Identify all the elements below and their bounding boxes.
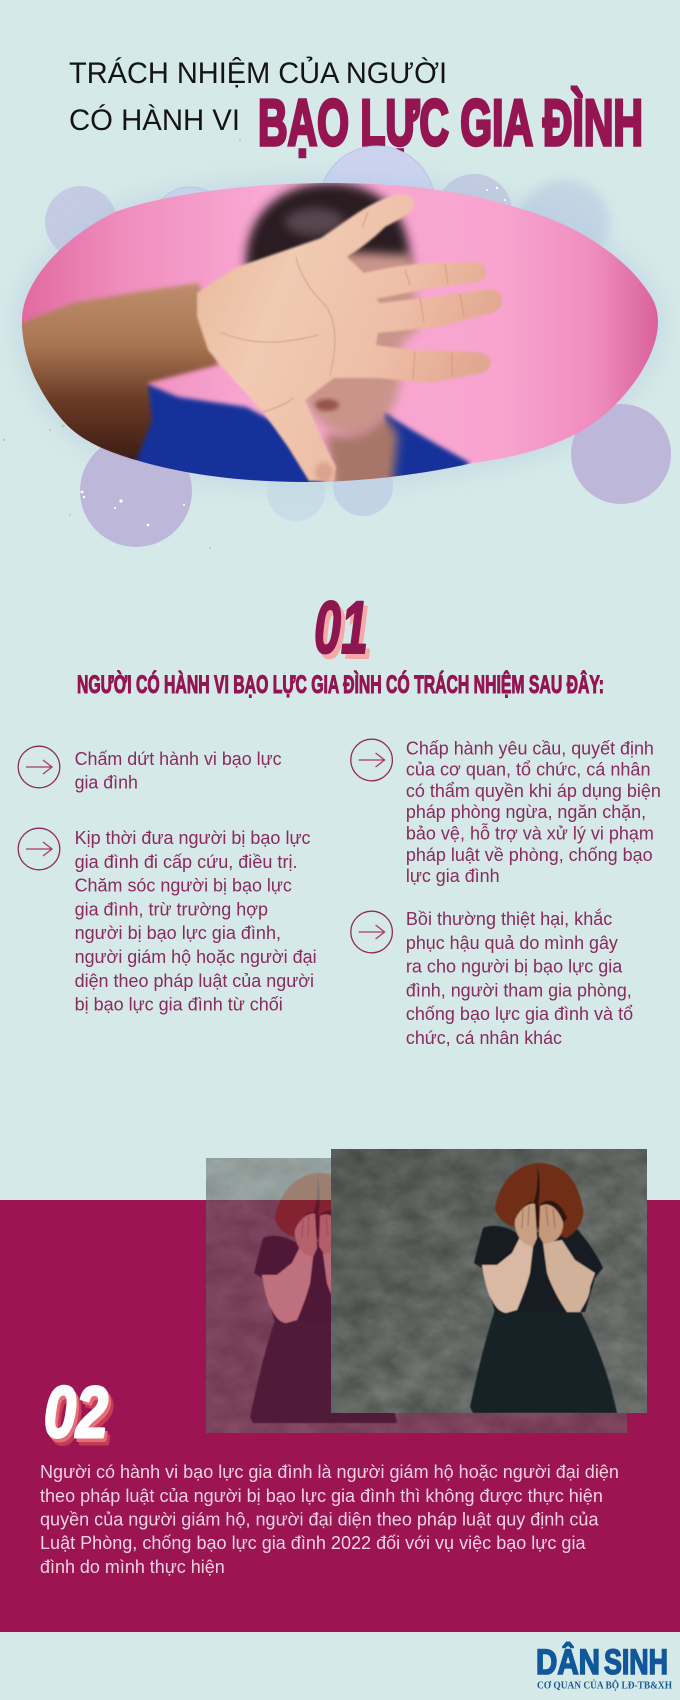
icon: arrow 3: [351, 739, 392, 781]
palm and fingers: [197, 194, 502, 481]
item: comply with decisions: Chấp hành yêu cầu, quyết định: [406, 738, 654, 758]
title line 1: TRÁCH NHIỆM CỦA NGƯỜI: [69, 56, 447, 90]
section 02 body text: theo pháp luật của người bị bạo lực gia đình thì không được thực hiện: [40, 1486, 603, 1506]
icon: arrow 2: [18, 828, 60, 870]
item: compensation: phục hậu quả do mình gây: [406, 933, 618, 953]
item: emergency care: gia đình đi cấp cứu, điều trị.: [75, 852, 297, 872]
item: emergency care: Kịp thời đưa người bị bạo lực: [75, 828, 310, 848]
section 01 number: 01: [314, 586, 368, 669]
item: comply with decisions: có thẩm quyền khi áp dụng biện: [406, 781, 661, 801]
item: stop violence: [75, 749, 282, 792]
logo: Dân Sinh: [536, 1642, 672, 1692]
section 02 body text: Luật Phòng, chống bạo lực gia đình 2022 đối với vụ việc bạo lực gia: [40, 1533, 586, 1553]
item: compensation: chống bạo lực gia đình và tổ: [406, 1004, 633, 1024]
blue shirt: [120, 383, 470, 490]
item: compensation: chức, cá nhân khác: [406, 1028, 562, 1048]
section 02 body text: [40, 1462, 619, 1577]
blurred mouth: [315, 399, 339, 411]
item: emergency care: bị bạo lực gia đình từ chối: [75, 995, 283, 1015]
item: comply with decisions: lực gia đình: [406, 866, 500, 886]
item: emergency care: diện theo pháp luật của người: [75, 971, 314, 991]
item: comply with decisions: pháp luật về phòng, chống bạo: [406, 845, 653, 865]
item: emergency care: người giám hộ hoặc người đại: [75, 947, 317, 967]
section 02 number: 02: [49, 1380, 113, 1460]
item: stop violence: Chấm dứt hành vi bạo lực: [75, 749, 282, 769]
item: emergency care: gia đình, trừ trường hợp: [75, 899, 268, 919]
item: comply with decisions: [406, 738, 661, 886]
item: emergency care: người bị bạo lực gia đình,: [75, 923, 281, 943]
section 02 body text: đình do mình thực hiện: [40, 1557, 225, 1577]
neck: [325, 415, 398, 490]
item: emergency care: [75, 828, 317, 1015]
item: comply with decisions: của cơ quan, tổ chức, cá nhân: [406, 760, 650, 780]
section 02 number: 02: [44, 1373, 108, 1453]
hero photo: hand raised in front of a blurred face: [10, 180, 660, 490]
section 02 body text: Người có hành vi bạo lực gia đình là người giám hộ hoặc người đại diện: [40, 1462, 619, 1482]
item: stop violence: gia đình: [75, 772, 138, 792]
item: emergency care: Chăm sóc người bị bạo lực: [75, 876, 292, 896]
item: compensation: [406, 908, 633, 1048]
blurred face: [300, 250, 418, 436]
decorative circles behind the photo: [3, 139, 671, 549]
blurred hair: [246, 183, 410, 272]
pink backdrop: [20, 180, 660, 485]
item: comply with decisions: bảo vệ, hỗ trợ và xử lý vi phạm: [406, 822, 654, 844]
panel: section 02 band: [0, 1200, 680, 1632]
section 02 number: 02: [46, 1376, 110, 1456]
icon: arrow 4: [351, 911, 392, 953]
thumb tip shading: [315, 462, 333, 482]
front photo: woman covering her face: [331, 1149, 647, 1413]
item: compensation: ra cho người bị bạo lực gia: [406, 957, 623, 977]
logo wordmark: DÂN: [536, 1642, 600, 1682]
faded back photo: [206, 1158, 627, 1433]
item: compensation: đình, người tham gia phòng,: [406, 980, 632, 1000]
item: comply with decisions: pháp phòng ngừa, ngăn chặn,: [406, 802, 646, 822]
title: [69, 56, 643, 159]
icon: arrow 1: [18, 746, 60, 788]
title line 2: CÓ HÀNH VI: [69, 104, 240, 137]
palm creases: [220, 212, 464, 412]
section 02 body text: quyền của người giám hộ, người đại diện theo pháp luật quy định của: [40, 1510, 599, 1530]
section 01 number: [314, 586, 372, 674]
section 01 number: 01: [318, 591, 372, 674]
forearm: [10, 283, 218, 462]
item: compensation: Bồi thường thiệt hại, khắc: [406, 908, 612, 929]
